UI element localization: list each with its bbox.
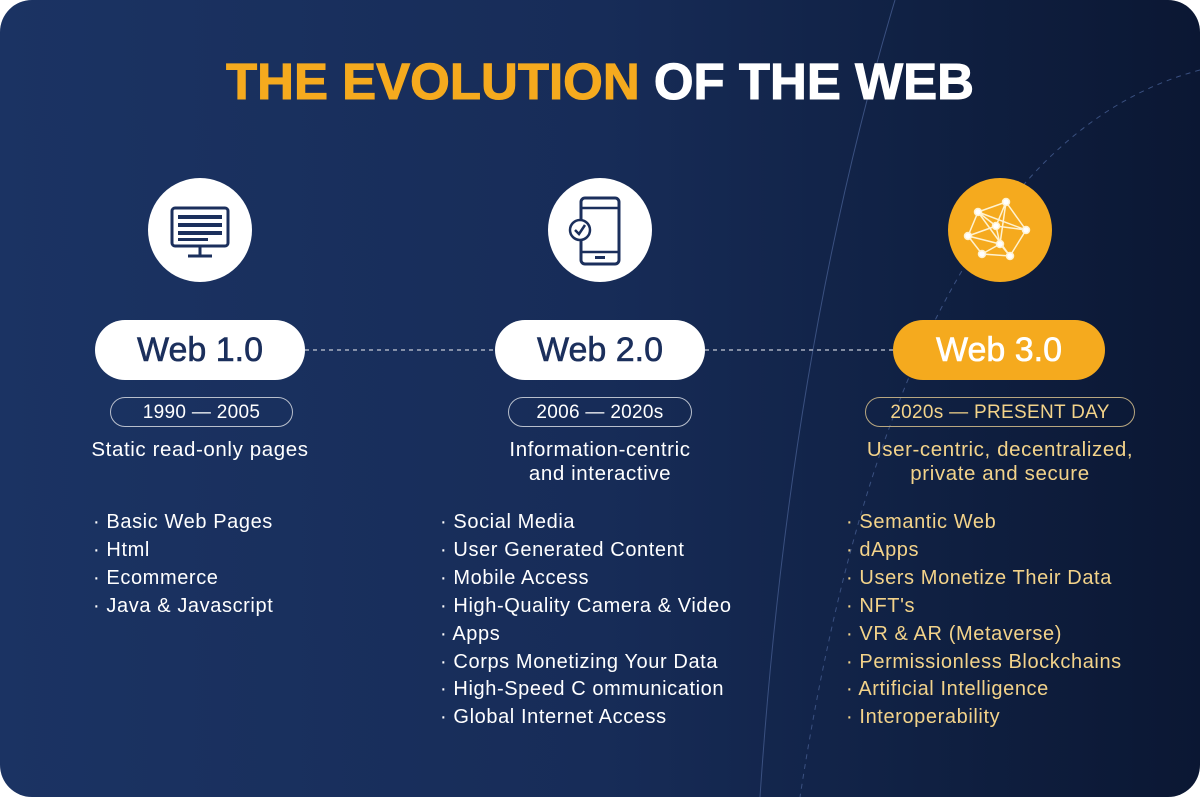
list: web3 xyxy=(848,511,1122,728)
list: web1 xyxy=(95,511,273,617)
list: web2: High-Quality Camera & Video xyxy=(453,595,732,617)
icon: phone xyxy=(548,178,652,282)
list: web2: Apps xyxy=(452,623,500,645)
date: web1: 1990 — 2005 xyxy=(143,402,260,423)
list: web3: Users Monetize Their Data xyxy=(859,567,1112,589)
pill: Web 3.0 xyxy=(893,320,1105,380)
date: web3: 2020s — PRESENT DAY xyxy=(890,402,1110,423)
pill: Web 2.0: Web 2.0 xyxy=(537,331,663,369)
list: web3: Semantic Web xyxy=(859,511,996,533)
pill: Web 2.0 xyxy=(495,320,705,380)
list: web2: Mobile Access xyxy=(453,567,589,589)
list: web2 xyxy=(442,511,732,728)
list: web2: Global Internet Access xyxy=(453,706,667,728)
list: web3: Interoperability xyxy=(859,706,1000,728)
list: web3: dApps xyxy=(859,539,919,561)
pill: Web 1.0: Web 1.0 xyxy=(137,331,263,369)
list: web2: User Generated Content xyxy=(453,539,685,561)
list: web1: Basic Web Pages xyxy=(106,511,273,533)
desc: web2: Information-centric xyxy=(509,438,691,461)
desc: web3: private and secure xyxy=(910,462,1090,485)
icon: monitor xyxy=(148,178,252,282)
icon: network xyxy=(948,178,1052,282)
list: web3: NFT's xyxy=(859,595,915,617)
list: web3: Permissionless Blockchains xyxy=(859,651,1122,673)
desc: web3 xyxy=(867,438,1133,485)
connector lines xyxy=(305,349,893,351)
desc: web3: User-centric, decentralized, xyxy=(867,438,1133,461)
desc: web2 xyxy=(509,438,691,485)
desc: web1: Static read-only pages xyxy=(91,438,309,461)
date: web2 xyxy=(508,397,692,427)
list: web1: Ecommerce xyxy=(106,567,219,589)
list: web1: Html xyxy=(106,539,150,561)
date: web3 xyxy=(865,397,1135,427)
list: web2: Social Media xyxy=(453,511,575,533)
desc: web2: and interactive xyxy=(529,462,671,485)
list: web2: Corps Monetizing Your Data xyxy=(453,651,718,673)
date: web2: 2006 — 2020s xyxy=(536,402,664,423)
title: THE EVOLUTION OF THE WEB xyxy=(226,53,974,110)
list: web1: Java & Javascript xyxy=(106,595,273,617)
list: web3: Artificial Intelligence xyxy=(858,678,1049,700)
pill: Web 1.0 xyxy=(95,320,305,380)
list: web2: High-Speed C ommunication xyxy=(453,678,724,700)
pill: Web 3.0: Web 3.0 xyxy=(936,331,1062,369)
list: web3: VR & AR (Metaverse) xyxy=(859,623,1062,645)
date: web1 xyxy=(110,397,293,427)
